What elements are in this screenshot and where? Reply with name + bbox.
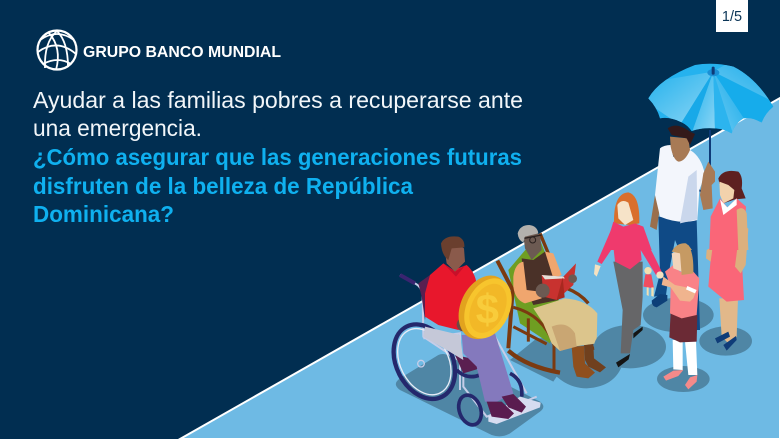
illustration: man with umbrella and woman, upper bodies [605, 57, 777, 250]
umbrella [643, 57, 777, 191]
wheelchair frame [382, 275, 537, 428]
umbrella handle [696, 130, 710, 191]
rocking chair [497, 233, 600, 373]
heading: blue question: ¿Cómo asegurar que las generaciones futuras [33, 144, 522, 170]
girl [662, 243, 699, 389]
light blue diagonal ground [180, 98, 780, 439]
shadow: middle woman [594, 325, 666, 368]
right woman lower body [706, 227, 748, 351]
girl hair top [673, 244, 692, 250]
shadow: girl [657, 366, 710, 392]
right woman upper body [709, 171, 748, 250]
man in red shirt [418, 236, 526, 419]
heading: blue question: Dominicana? [33, 201, 174, 227]
shadow: man with umbrella [643, 298, 714, 332]
man upper body [650, 126, 715, 230]
logo: Grupo Banco Mundial [38, 30, 281, 70]
footrest [488, 397, 541, 424]
logo wordmark: GRUPO BANCO MUNDIAL [83, 44, 281, 61]
heading: white lines: Ayudar a las familias pobres a recuperarse ante [33, 87, 523, 113]
heading: blue question [33, 144, 522, 227]
doll [643, 267, 654, 297]
illustration: man in wheelchair and woman in rocking chair [382, 225, 623, 436]
page counter badge [716, 0, 748, 32]
icon: gold dollar coin [449, 267, 521, 347]
umbrella canopy [648, 64, 774, 134]
illustration: family group [594, 217, 752, 392]
shadow: wheelchair [396, 354, 543, 436]
heading: blue question: disfruten de la belleza de República [33, 173, 413, 199]
middle woman [594, 228, 664, 367]
icon: globe [38, 30, 76, 70]
man trousers [652, 217, 700, 330]
woman reading [513, 225, 606, 378]
shadow: rocking chair [510, 337, 623, 388]
page counter badge: 1/5 [722, 9, 742, 25]
shadow: right woman [699, 326, 752, 356]
heading: white lines [33, 87, 523, 141]
heading: white lines: una emergencia. [33, 115, 202, 141]
middle woman upper body [605, 192, 652, 250]
icon: gold dollar coin: $ [476, 285, 499, 332]
